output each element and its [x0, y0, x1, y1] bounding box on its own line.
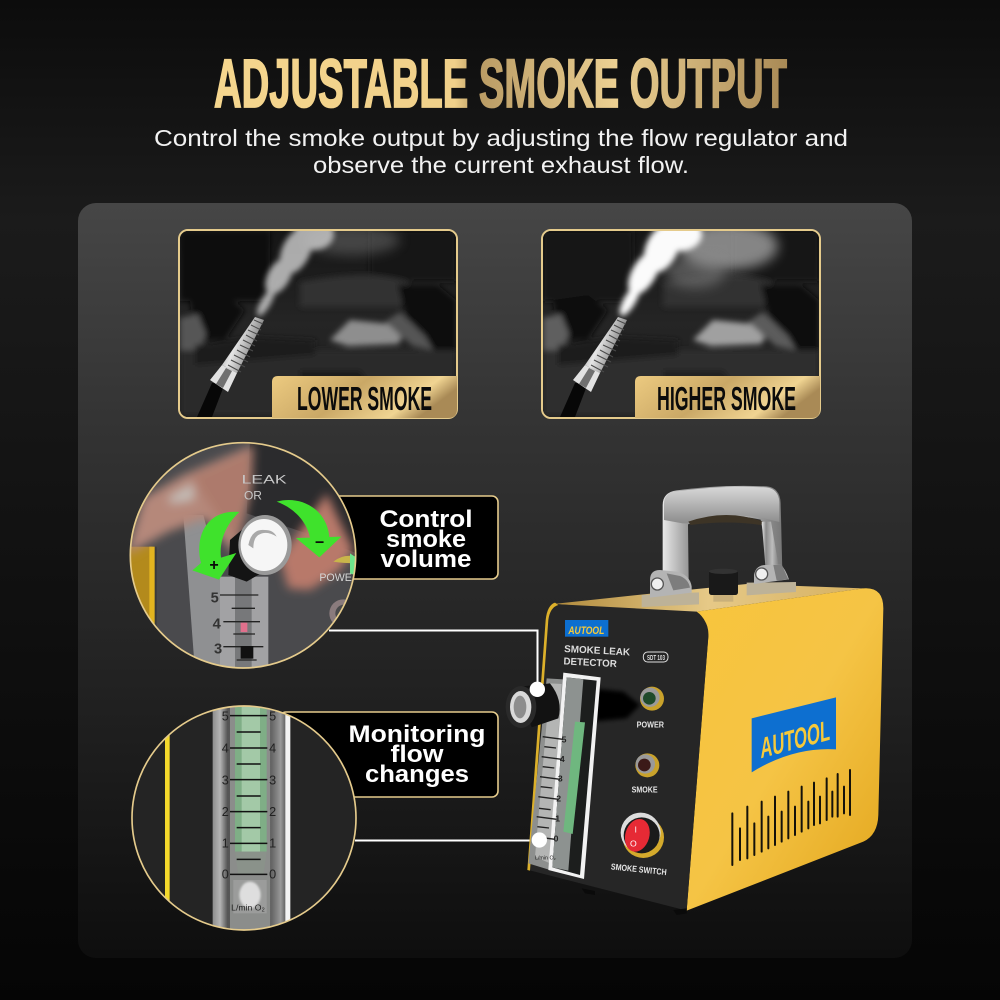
nozzle [585, 317, 627, 373]
nozzle [222, 317, 264, 373]
circle: knob close-up: + [209, 557, 219, 574]
label: higher smoke: HIGHER SMOKE [657, 380, 796, 417]
smoke lamp: SMOKE [632, 784, 658, 794]
flowmeter: 2 [556, 794, 561, 804]
side logo: AUTOOL [760, 714, 830, 765]
scale numbers: 2 [222, 805, 229, 819]
tube body [213, 700, 287, 933]
scale numbers: 5 [269, 710, 276, 724]
scale ticks [230, 716, 267, 874]
front logo [565, 620, 608, 637]
smoke switch: O [630, 839, 637, 849]
device name [563, 644, 631, 670]
device: smoke leak detector [506, 486, 883, 915]
callout: control smoke volume: smoke [386, 526, 466, 553]
callout: monitoring flow changes: changes [365, 761, 469, 788]
callout: monitoring flow changes: Monitoring [348, 721, 486, 748]
knob [228, 530, 260, 582]
flowmeter [528, 673, 601, 879]
label: higher smoke [635, 376, 820, 418]
circle: knob close-up: OR [244, 488, 262, 502]
faceplate print: LEAK [242, 472, 287, 486]
label: lower smoke: LOWER SMOKE [297, 380, 432, 417]
circle: knob close-up: POWE [319, 572, 352, 584]
scale numbers: 0 [222, 867, 229, 881]
model badge [643, 652, 668, 662]
marker dots [530, 682, 547, 848]
front logo: AUTOOL [568, 625, 604, 637]
circle: flow tube close-up [130, 700, 370, 933]
hose [560, 383, 588, 417]
label: lower smoke [272, 376, 457, 418]
scale numbers [222, 710, 276, 913]
smoke plume [253, 231, 402, 319]
scale numbers: 4 [269, 742, 276, 756]
hands [127, 445, 353, 590]
subtitle: observe the current exhaust flow. [313, 152, 689, 178]
model badge: SDT 103 [647, 653, 665, 662]
smoke plume [616, 217, 778, 319]
scale numbers: 0 [269, 867, 276, 881]
front face [528, 604, 708, 911]
callout: monitoring flow changes [280, 712, 498, 797]
callout: control smoke volume [300, 496, 498, 579]
arrow: minus [277, 500, 341, 557]
circle: knob close-up: 5 [211, 591, 219, 607]
scale numbers: 2 [269, 805, 276, 819]
hinges and top knob [642, 564, 796, 607]
yellow side [687, 588, 883, 911]
subtitle [154, 125, 848, 178]
leader line: flow tube [355, 840, 539, 842]
green float column [235, 703, 267, 852]
scale numbers: 5 [222, 710, 229, 724]
vent slots [732, 770, 850, 865]
scale numbers: 1 [222, 836, 229, 850]
panel: higher smoke card [542, 217, 820, 418]
callout: monitoring flow changes: flow [390, 741, 444, 768]
flow knob [506, 683, 560, 728]
flowmeter: 0 [554, 834, 559, 844]
device name: DETECTOR [563, 656, 617, 670]
flowmeter: 1 [555, 814, 560, 824]
callout: control smoke volume: volume [380, 546, 472, 573]
flowmeter: 4 [560, 754, 565, 764]
top face [553, 584, 863, 612]
power lamp: POWER [637, 720, 665, 730]
handle [663, 486, 782, 581]
device name: SMOKE LEAK [564, 644, 631, 658]
circle: knob close-up: 3 [214, 641, 222, 657]
panel: lower smoke card [179, 218, 457, 418]
flowmeter: L/min O₂ [535, 855, 556, 861]
circle: knob close-up [127, 440, 363, 673]
scale numbers: 4 [222, 742, 229, 756]
arrow: plus [192, 512, 239, 580]
hose [197, 383, 225, 417]
scale numbers: 3 [269, 773, 276, 787]
power lamp [637, 687, 665, 730]
leader line: knob [329, 630, 538, 690]
side logo [752, 697, 836, 772]
smoke switch: I [635, 826, 637, 835]
subtitle: Control the smoke output by adjusting the flow regulator and [154, 125, 848, 151]
smoke switch [610, 813, 667, 877]
feet [582, 888, 687, 915]
rotameter scale [183, 515, 220, 672]
callout: control smoke volume: Control [380, 506, 472, 533]
scale numbers: 3 [222, 773, 229, 787]
smoke lamp [632, 753, 659, 794]
dark faceplate [247, 440, 357, 553]
scale numbers: 1 [269, 836, 276, 850]
circle: knob close-up: 4 [213, 617, 222, 633]
panel: main background [78, 203, 912, 958]
flowmeter: 3 [558, 774, 563, 784]
flowmeter: 5 [562, 734, 567, 744]
knob shadow [593, 688, 640, 722]
scale numbers: L/min O₂ [231, 903, 265, 913]
smoke switch: SMOKE SWITCH [610, 861, 667, 877]
circle: knob close-up: − [315, 534, 324, 551]
